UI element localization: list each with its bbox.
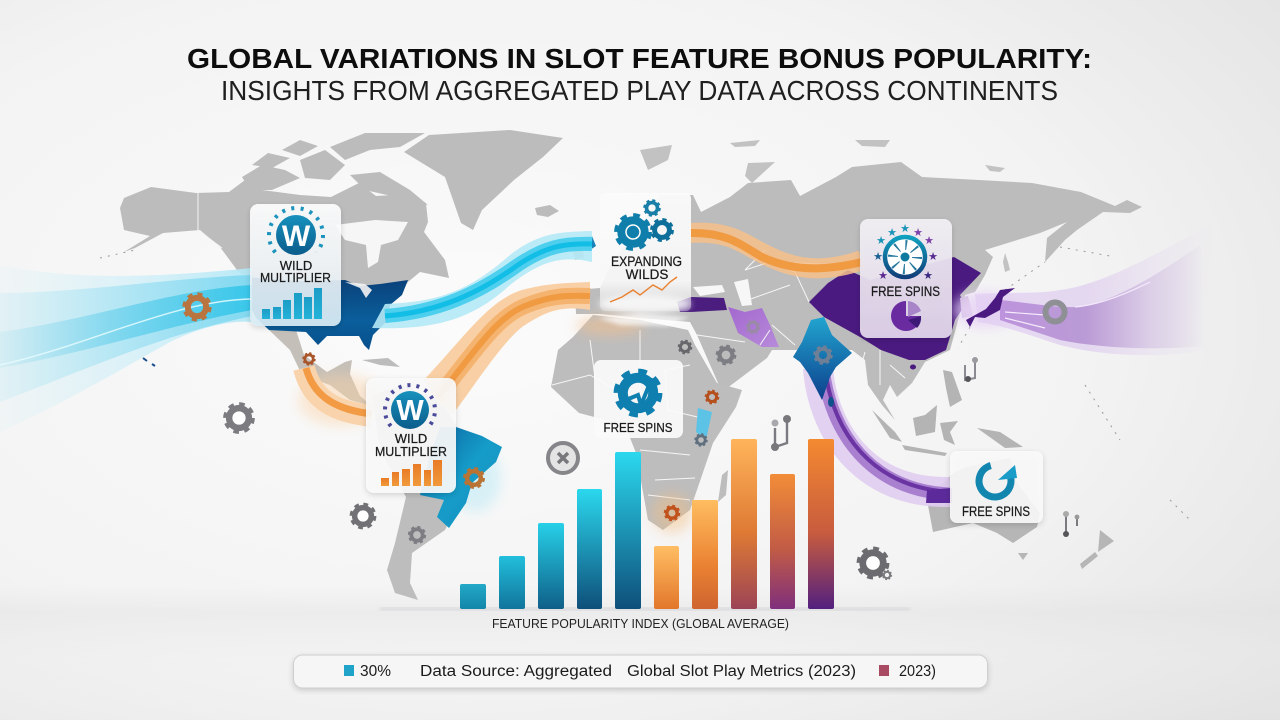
card label: MULTIPLIER <box>260 270 331 285</box>
chart caption: FEATURE POPULARITY INDEX (GLOBAL AVERAGE) <box>492 616 789 631</box>
card label: WILDS <box>626 267 668 282</box>
map: Kenya highlight <box>696 408 712 440</box>
icon: wheel with stars: ★ <box>878 270 888 282</box>
map: India highlight <box>793 317 852 400</box>
icon: pie chart <box>891 301 921 331</box>
floor shading <box>0 585 1280 720</box>
axis shadow <box>380 608 910 610</box>
icon: refresh ring <box>974 460 1017 502</box>
map: Korea <box>960 296 973 318</box>
map: China highlight <box>809 257 981 360</box>
icon: grey gear Chile <box>351 504 375 528</box>
flow: purple ribbon to Australia <box>818 368 952 503</box>
bars: blue series <box>460 452 641 609</box>
icon: grey gear Argentina <box>409 527 425 543</box>
icon: copper gear Mexico <box>303 353 315 365</box>
legend bar <box>294 655 988 688</box>
map: Black Sea and Caspian <box>693 279 752 306</box>
map: Iran highlight <box>728 307 779 347</box>
title <box>187 43 1092 106</box>
card label: EXPANDING <box>611 254 682 269</box>
map: Eurasia <box>573 140 1142 456</box>
icon: grey gear Pacific <box>225 404 253 432</box>
map: Madagascar <box>718 470 728 502</box>
icon: wheel with stars: ★ <box>900 223 910 235</box>
icon: spark line <box>610 277 677 302</box>
map: Japan highlight <box>966 288 1015 327</box>
icon: copper gear Pacific <box>184 294 210 320</box>
map: Africa <box>551 315 742 530</box>
map: United Kingdom highlight <box>584 236 596 250</box>
icon: wheel with stars: ★ <box>887 227 897 239</box>
map: South America <box>372 385 502 600</box>
icon: round grey badge <box>548 443 578 473</box>
card label: FREE SPINS <box>871 284 940 299</box>
flow: purple fan toward Pacific <box>953 222 1215 355</box>
icon: wheel with stars <box>873 223 938 282</box>
map: Asia borders <box>697 250 905 385</box>
icon: large grey gear <box>859 549 891 579</box>
bar chart <box>380 439 910 610</box>
card label: WILD <box>395 431 427 446</box>
card label: FREE SPINS <box>604 420 673 435</box>
title: GLOBAL VARIATIONS IN SLOT FEATURE BONUS POPULARITY: <box>187 43 1092 74</box>
legend swatch: blue <box>344 665 354 676</box>
data source text: Global Slot Play Metrics (2023) <box>627 663 856 680</box>
flow: orange ribbon across Asia <box>690 233 862 268</box>
bars: orange series <box>654 439 834 609</box>
card label: WILD <box>280 258 312 273</box>
mini bar chart <box>381 460 442 486</box>
icon: copper gear Brazil <box>465 469 483 487</box>
card: Free Spins Oceania <box>950 451 1043 523</box>
map: United States highlight <box>245 277 408 350</box>
card: Wild Multiplier South America <box>366 378 456 493</box>
flow: orange ribbon from Mexico <box>298 368 382 426</box>
map: Southeast Asia <box>872 370 1023 456</box>
legend swatch: red <box>879 665 889 676</box>
legend label: 30%: 30% <box>360 663 391 680</box>
mini bar chart <box>262 288 322 319</box>
icon: orange gear South Africa <box>652 493 692 533</box>
data source text: Data Source: Aggregated <box>420 663 612 680</box>
flow: blue ribbon from the Pacific <box>0 265 252 432</box>
icon: W badge: W <box>282 220 311 253</box>
legend label: 2023: 2023) <box>899 663 936 680</box>
icon: grey gear Tanzania <box>695 434 707 446</box>
icon: W badge: W <box>396 395 424 427</box>
map: Brazil glow <box>449 444 501 512</box>
icon: grey gear Sahara <box>679 341 691 353</box>
icon: wheel with stars: ★ <box>928 251 938 263</box>
map: island specks <box>100 247 1190 520</box>
icon: orange gear Ethiopia <box>706 391 718 403</box>
map: Ireland <box>573 248 584 260</box>
icon: gear Iran <box>747 321 759 333</box>
icon: wheel with stars: ★ <box>923 270 933 282</box>
map: Hudson Bay <box>335 220 408 268</box>
icon: grey ring Japan <box>1046 302 1064 322</box>
map: Brazil highlight <box>420 427 502 528</box>
map: Sri Lanka <box>828 397 834 407</box>
flow: orange ribbon to Europe <box>424 282 590 414</box>
icon: gears <box>617 200 672 248</box>
icon: wheel with stars: ★ <box>873 251 883 263</box>
icon: wheel with stars: ★ <box>924 235 934 247</box>
card label: FREE SPINS <box>962 503 1030 519</box>
map: Alaska border <box>198 193 222 248</box>
map: Hainan <box>910 364 916 370</box>
map: Turkey highlight <box>677 297 727 312</box>
title: INSIGHTS FROM AGGREGATED PLAY DATA ACROSS CONTINENTS <box>221 75 1058 106</box>
icon: hook connector <box>965 357 978 382</box>
map: Hawaii <box>143 358 155 366</box>
card: Free Spins Asia <box>860 219 952 338</box>
flow: blue ribbon to Europe <box>372 231 592 328</box>
card: Expanding Wilds Europe <box>600 193 691 311</box>
card: Wild Multiplier North America <box>250 204 341 326</box>
icon: hook connector <box>771 415 791 451</box>
icon: wheel with stars: ★ <box>913 227 923 239</box>
map: North America <box>120 130 563 406</box>
map: Australia and New Zealand <box>927 458 1114 569</box>
icon: hook connector <box>1063 511 1079 537</box>
icon: gear with check <box>617 372 659 414</box>
icon: gear India <box>815 347 831 363</box>
card: Free Spins Africa <box>594 360 683 438</box>
icon: wheel with stars: ★ <box>876 235 886 247</box>
card label: MULTIPLIER <box>375 444 447 459</box>
icon: grey gear Arabia <box>717 346 735 364</box>
world map <box>100 130 1190 600</box>
mist around Mediterranean <box>576 295 691 335</box>
map: Great Lakes <box>345 282 372 298</box>
